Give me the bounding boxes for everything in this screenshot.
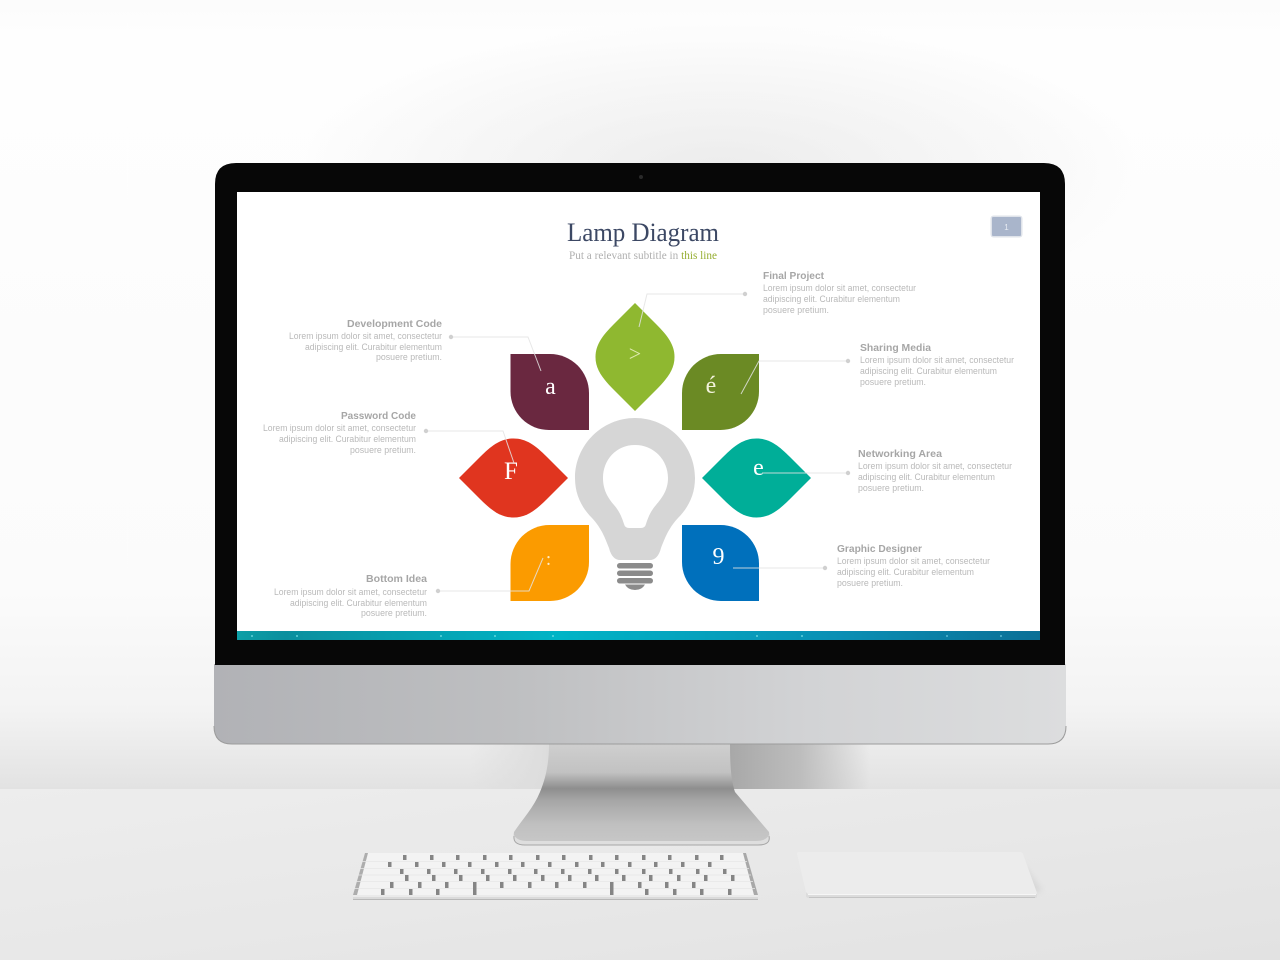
callout: Final Project: Final Project — [763, 270, 824, 282]
petal: teal — [702, 438, 811, 518]
petal: purple — [510, 354, 589, 430]
slide screen — [237, 192, 1040, 640]
petal: blue — [682, 525, 759, 601]
title: Lamp Diagram — [567, 218, 719, 247]
callout: Sharing Media: posuere pretium. — [860, 377, 926, 387]
callout: Graphic Designer: posuere pretium. — [837, 578, 903, 588]
callout: Development Code: adipiscing elit. Curabitur elementum — [305, 342, 442, 352]
callout: Password Code: posuere pretium. — [350, 445, 416, 455]
callout: Graphic Designer — [733, 543, 990, 588]
callout: Password Code — [263, 410, 514, 463]
petal: red: F — [504, 458, 518, 485]
callout: Password Code: Password Code — [341, 410, 416, 422]
subtitle: Put a relevant subtitle in this line — [569, 248, 717, 262]
petal: teal: e — [753, 455, 764, 481]
callout: Final Project: Lorem ipsum dolor sit amet, consectetur — [763, 283, 916, 293]
callout: Bottom Idea: posuere pretium. — [361, 608, 427, 618]
callout: Development Code: Development Code — [347, 318, 442, 330]
monitor — [214, 163, 1066, 744]
callout: Networking Area: posuere pretium. — [858, 483, 924, 493]
petal: top green — [596, 303, 674, 411]
callout: Bottom Idea — [274, 558, 543, 618]
petal: olive: é — [706, 373, 716, 399]
callout: Graphic Designer: Graphic Designer — [837, 543, 922, 555]
callout: Networking Area: adipiscing elit. Curabitur elementum — [858, 472, 995, 482]
monitor chin — [214, 664, 1066, 744]
callout: Graphic Designer: Lorem ipsum dolor sit amet, consectetur — [837, 556, 990, 566]
callout: Final Project: adipiscing elit. Curabitur elementum — [763, 294, 900, 304]
page number badge — [990, 216, 1022, 238]
callout: Networking Area: Lorem ipsum dolor sit amet, consectetur — [858, 461, 1012, 471]
callout: Sharing Media: Lorem ipsum dolor sit amet, consectetur — [860, 355, 1014, 365]
petal: orange — [510, 525, 589, 601]
trackpad — [797, 852, 1042, 898]
callout: Networking Area: Networking Area — [858, 448, 942, 460]
callout: Final Project: posuere pretium. — [763, 305, 829, 315]
callout: Networking Area — [762, 448, 1012, 493]
petal: red — [459, 438, 568, 518]
keyboard — [353, 853, 758, 900]
petal: top green: > — [629, 341, 641, 366]
petal: orange: : — [546, 549, 551, 570]
monitor chin edge — [214, 726, 1066, 744]
callout: Development Code — [289, 318, 541, 371]
callout: Sharing Media — [741, 342, 1014, 394]
camera — [639, 175, 643, 179]
callout: Bottom Idea: Lorem ipsum dolor sit amet, consectetur — [274, 587, 427, 597]
monitor stand — [514, 744, 769, 845]
callout: Bottom Idea: Bottom Idea — [366, 573, 427, 585]
callout: Development Code: posuere pretium. — [376, 352, 442, 362]
petal: purple: a — [545, 374, 556, 400]
petal: olive — [682, 354, 759, 430]
callout: Sharing Media: adipiscing elit. Curabitur elementum — [860, 366, 997, 376]
callout: Graphic Designer: adipiscing elit. Curabitur elementum — [837, 567, 974, 577]
callout: Sharing Media: Sharing Media — [860, 342, 931, 354]
page number badge: 1 — [1004, 223, 1009, 232]
petal: blue: 9 — [712, 544, 724, 570]
light bulb icon — [575, 418, 695, 590]
callout: Final Project — [639, 270, 916, 327]
monitor bezel — [215, 163, 1065, 665]
slide footer bar — [237, 631, 1040, 640]
callout: Bottom Idea: adipiscing elit. Curabitur elementum — [290, 598, 427, 608]
callout: Development Code: Lorem ipsum dolor sit amet, consectetur — [289, 331, 442, 341]
callout: Password Code: adipiscing elit. Curabitur elementum — [279, 434, 416, 444]
callout: Password Code: Lorem ipsum dolor sit amet, consectetur — [263, 423, 416, 433]
